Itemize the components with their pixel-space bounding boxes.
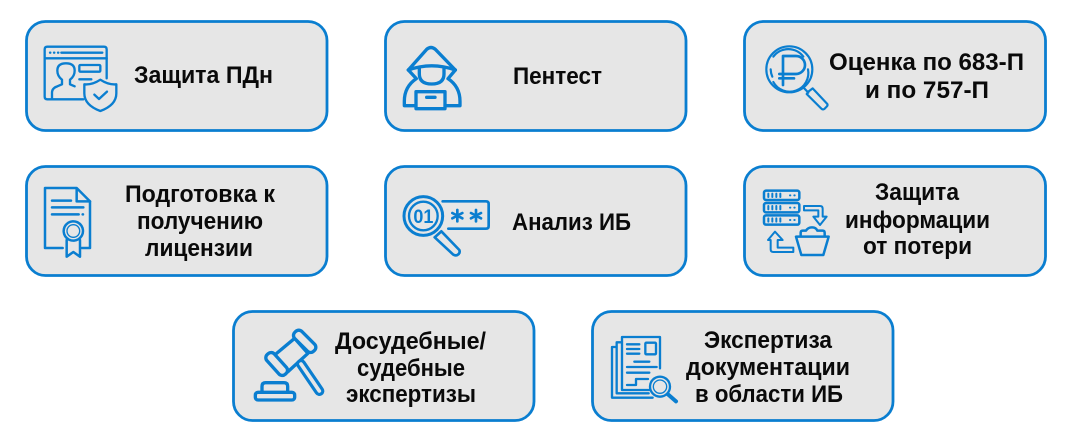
- panel: Анализ ИБ: [386, 166, 686, 276]
- label: three lines: [845, 179, 990, 260]
- panel: Досудебные/судебные экспертизы: [234, 312, 534, 420]
- icon: licence document with seal: [45, 188, 90, 257]
- label: three lines: лицензии: [145, 235, 253, 262]
- card background: [744, 166, 1046, 276]
- card background: [26, 166, 327, 276]
- label: three lines: получению: [137, 208, 263, 235]
- card background: [386, 166, 686, 276]
- icon: personal data window with shield: [45, 47, 116, 111]
- label: Пентест: [513, 63, 602, 90]
- label: two lines: и по 757-П: [865, 77, 989, 104]
- icon: magnifier over password field: [404, 197, 489, 255]
- panel: Защита информации от потери: [744, 166, 1046, 276]
- icon: gavel: [255, 328, 319, 400]
- label: three lines: [125, 181, 276, 262]
- label: three lines: Подготовка к: [125, 181, 276, 208]
- card background: [744, 22, 1046, 130]
- panel: Оценка по 683-П и по 757-П: [744, 22, 1046, 130]
- icon: magnifier over password field: 01: [413, 207, 434, 228]
- label: three lines: в области ИБ: [695, 381, 843, 408]
- panel: Подготовка к получению лицензии: [26, 166, 327, 276]
- label: three lines: [686, 327, 850, 408]
- label: three lines: Досудебные/: [335, 328, 486, 355]
- label: three lines: судебные: [357, 355, 465, 382]
- card background: [592, 312, 893, 420]
- label: three lines: Экспертиза: [704, 327, 833, 354]
- label: three lines: документации: [686, 354, 850, 381]
- panel: Пентест: [386, 22, 686, 130]
- panel: Защита ПДн: [26, 22, 327, 130]
- label: Анализ ИБ: [512, 209, 631, 236]
- panel: Экспертиза документации в области ИБ: [592, 312, 893, 420]
- card background: [234, 312, 534, 420]
- card background: [386, 22, 686, 130]
- label: three lines: Защита: [875, 179, 960, 206]
- icon: ruble magnifier: [766, 46, 828, 109]
- label: three lines: информации: [845, 207, 990, 234]
- label: two lines: [829, 49, 1024, 104]
- icon: hooded hacker with laptop: [404, 47, 460, 109]
- label: three lines: [335, 328, 486, 408]
- label: three lines: от потери: [863, 233, 972, 260]
- label: two lines: Оценка по 683-П: [829, 49, 1024, 76]
- label: three lines: экспертизы: [346, 381, 476, 408]
- icon: documents with magnifier: [612, 337, 676, 401]
- icon: servers, arrows and folder: [764, 191, 829, 255]
- label: Защита ПДн: [134, 62, 273, 89]
- card background: [26, 22, 327, 130]
